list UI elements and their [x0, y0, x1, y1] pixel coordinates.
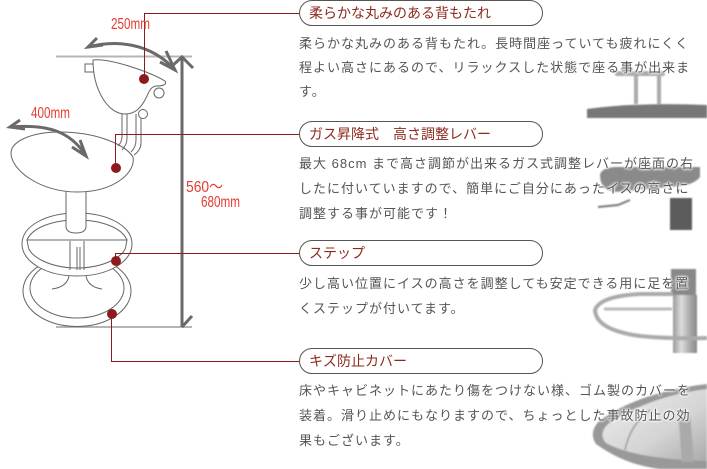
- photo: backrest support: [587, 71, 707, 118]
- stool base: [23, 256, 131, 326]
- text: scratch guard: 床やキャビネットにあたり傷をつけない様、ゴム製のカバーを: [299, 383, 691, 398]
- text: scratch guard: 装着。滑り止めにもなりますので、ちょっとした事故防止の効: [299, 408, 690, 423]
- text: scratch guard: 果もございます。: [299, 433, 410, 448]
- heading: backrest: 柔らかな丸みのある背もたれ: [309, 5, 491, 21]
- height guide lines: [56, 56, 192, 327]
- text: step: 少し高い位置にイスの高さを調整しても安定できる用に足を置: [299, 276, 689, 291]
- heading: step: ステップ: [309, 245, 365, 261]
- heading: backrest: [299, 0, 543, 26]
- backrest: [85, 60, 166, 118]
- heading: scratch guard: キズ防止カバー: [309, 353, 407, 369]
- heading: gas lever: ガス昇降式 高さ調整レバー: [309, 126, 491, 142]
- text: gas lever: [299, 156, 694, 221]
- foot ring: [22, 213, 132, 276]
- text: step: [299, 274, 690, 316]
- heading: scratch guard: [299, 348, 543, 374]
- seat: [11, 132, 133, 192]
- text: scratch guard: [299, 383, 691, 448]
- leader lines: [112, 14, 300, 362]
- stool line drawing: [11, 60, 166, 326]
- dimension labels: 250mm: [111, 16, 150, 33]
- gas column: [66, 190, 86, 233]
- heading: gas lever: [299, 121, 543, 147]
- text: backrest: 柔らかな丸みのある背もたれ。長時間座っていても疲れにくく: [299, 36, 689, 51]
- text: backrest: [299, 36, 690, 99]
- text: backrest: 程よい高さにあるので、リラックスした状態で座る事が出来ま: [299, 60, 690, 75]
- dimension labels: 400mm: [31, 105, 70, 122]
- dimension labels: 560～: [186, 179, 223, 196]
- photo: gas lever: [598, 167, 700, 230]
- photo: foot step: [595, 269, 707, 353]
- photo: rubber cover base: [593, 384, 707, 469]
- back supports: [118, 114, 141, 155]
- dimension labels: 680mm: [201, 194, 240, 211]
- arrow: height: [172, 57, 193, 327]
- text: gas lever: 調整する事が可能です！: [299, 206, 453, 221]
- dimension labels: [31, 16, 240, 211]
- arrow: backrest width: [88, 38, 175, 70]
- text: gas lever: 最大 68cm まで高さ調節が出来るガス式調整レバーが座面の右: [299, 156, 694, 171]
- heading: step: [299, 240, 543, 266]
- text: gas lever: したに付いていますので、簡単にご自分にあったイスの高さに: [299, 181, 689, 196]
- text: step: くステップが付いてます。: [299, 301, 465, 316]
- arrow: seat width: [10, 120, 86, 156]
- text: backrest: す。: [299, 84, 326, 99]
- marker dots: [107, 74, 149, 319]
